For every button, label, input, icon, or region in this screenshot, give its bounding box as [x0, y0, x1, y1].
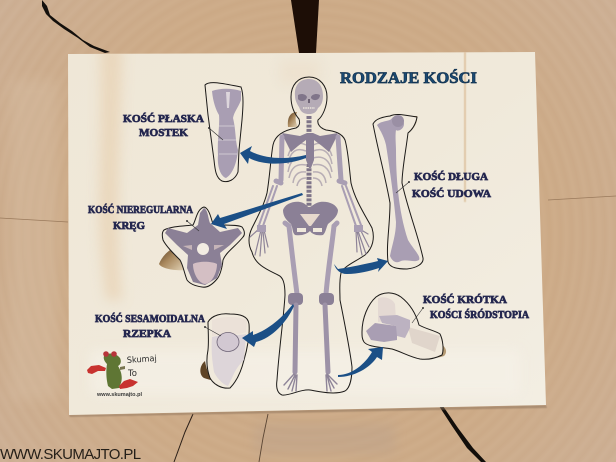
puzzle piece: sternum (flat bone) — [205, 83, 243, 182]
skeleton skull — [295, 79, 323, 114]
body outline — [249, 77, 373, 395]
puzzle piece: kneecap (sesamoid bone) — [204, 314, 249, 388]
skeleton ribs — [288, 143, 332, 186]
skeleton lower legs — [295, 305, 328, 372]
puzzle piece: foot (short bone) — [362, 293, 443, 359]
label: short bone — [423, 294, 529, 321]
label: long bone — [412, 171, 491, 200]
logo: Skumaj To frog: To — [127, 369, 137, 379]
skeleton pelvis — [283, 202, 338, 235]
puzzle piece: vertebra (irregular bone) — [162, 207, 244, 287]
label: irregular bone: KOŚĆ NIEREGULARNA — [88, 204, 193, 216]
label: flat bone: KOŚĆ PŁASKA — [123, 113, 204, 125]
label: flat bone — [123, 113, 204, 139]
puzzle piece: human body with skeleton — [249, 77, 373, 395]
label: long bone: KOŚĆ UDOWA — [412, 188, 491, 200]
skeleton feet — [284, 374, 337, 391]
arrow: spine to vertebra — [211, 193, 303, 229]
icon: frog — [87, 351, 138, 389]
arrow: femur to leg — [334, 258, 388, 274]
skeleton arms — [259, 137, 361, 226]
logo: Skumaj To frog: www.skumajto.pl — [96, 392, 142, 398]
arrow: body to sternum — [240, 146, 306, 164]
skeleton femurs — [285, 223, 337, 294]
label: flat bone: MOSTEK — [139, 127, 188, 139]
cracks in the wood slice — [42, 0, 486, 462]
arrow: leg to kneecap — [242, 304, 294, 347]
plywood board — [68, 46, 547, 417]
arrow: foot to body — [338, 347, 383, 377]
label: short bone: KOŚCI ŚRÓDSTOPIA — [430, 309, 529, 321]
puzzle finger holes — [159, 83, 446, 380]
label: irregular bone — [88, 204, 193, 232]
label: sesamoid bone — [95, 313, 205, 340]
title: RODZAJE KOŚCI — [340, 68, 477, 87]
logo: Skumaj To frog — [87, 351, 157, 398]
skeleton sternum and shoulders — [282, 133, 338, 168]
label: irregular bone: KRĘG — [113, 220, 145, 232]
label: short bone: KOŚĆ KRÓTKA — [423, 294, 507, 306]
label: sesamoid bone: RZEPKA — [123, 328, 171, 340]
label: long bone: KOŚĆ DŁUGA — [414, 171, 488, 183]
puzzle piece: femur (long bone) — [373, 114, 423, 269]
skeleton hands — [250, 225, 369, 256]
logo: Skumaj To frog: Skumaj — [127, 354, 157, 366]
skeleton spine — [306, 116, 312, 206]
label: sesamoid bone: KOŚĆ SESAMOIDALNA — [95, 313, 205, 325]
skeleton knees — [288, 293, 334, 305]
